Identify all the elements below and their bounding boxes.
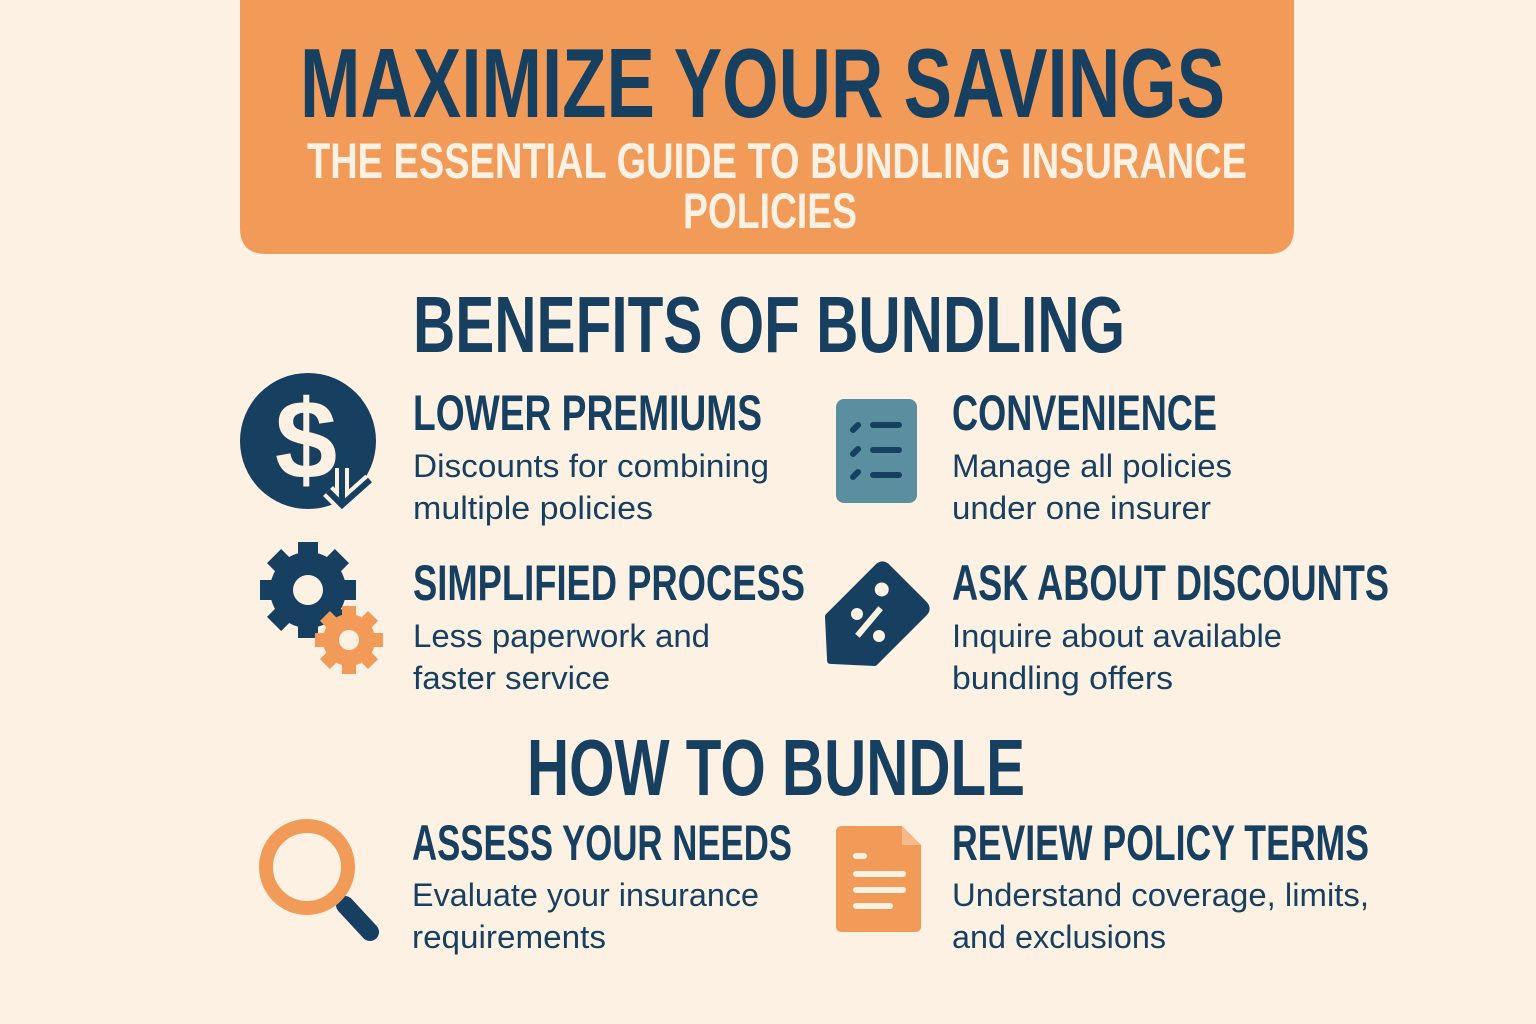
icon: dollar down: $ (275, 377, 337, 502)
item: lower premiums: Discounts for combining (413, 448, 769, 484)
item: lower premiums: LOWER PREMIUMS (413, 385, 762, 441)
heading: how to bundle: HOW TO BUNDLE (527, 723, 1025, 812)
icon: dollar down (240, 373, 376, 509)
item: lower premiums (413, 385, 769, 526)
item: simplified process: Less paperwork and (413, 618, 710, 654)
item: assess your needs (412, 815, 792, 955)
item: review policy terms: REVIEW POLICY TERMS (952, 815, 1369, 871)
icon: checklist (836, 399, 917, 503)
item: simplified process: faster service (413, 660, 610, 696)
icon: magnifier (266, 826, 370, 932)
header banner (240, 0, 1294, 254)
icon: document (836, 826, 921, 932)
item: simplified process (413, 555, 805, 696)
item: convenience: under one insurer (952, 490, 1211, 526)
item: convenience: CONVENIENCE (952, 385, 1217, 441)
heading: benefits of bundling: BENEFITS OF BUNDLING (413, 280, 1125, 369)
item: assess your needs: requirements (412, 919, 606, 955)
item: assess your needs: ASSESS YOUR NEEDS (412, 815, 792, 871)
item: ask about discounts: bundling offers (952, 660, 1173, 696)
item: simplified process: SIMPLIFIED PROCESS (413, 555, 805, 611)
item: convenience (952, 385, 1232, 526)
item: review policy terms (952, 815, 1369, 955)
title: MAXIMIZE YOUR SAVINGS (300, 28, 1225, 138)
subtitle: THE ESSENTIAL GUIDE TO BUNDLING INSURANCE (307, 133, 1247, 189)
item: ask about discounts: Inquire about available (952, 618, 1282, 654)
icon: discount tag (807, 562, 929, 684)
subtitle: POLICIES (683, 183, 857, 239)
item: review policy terms: Understand coverage, limits, (952, 877, 1369, 913)
subtitle (307, 133, 1247, 239)
icon: gears (260, 542, 383, 674)
item: ask about discounts (952, 555, 1389, 696)
item: lower premiums: multiple policies (413, 490, 653, 526)
item: convenience: Manage all policies (952, 448, 1232, 484)
item: assess your needs: Evaluate your insurance (412, 877, 759, 913)
item: review policy terms: and exclusions (952, 919, 1166, 955)
